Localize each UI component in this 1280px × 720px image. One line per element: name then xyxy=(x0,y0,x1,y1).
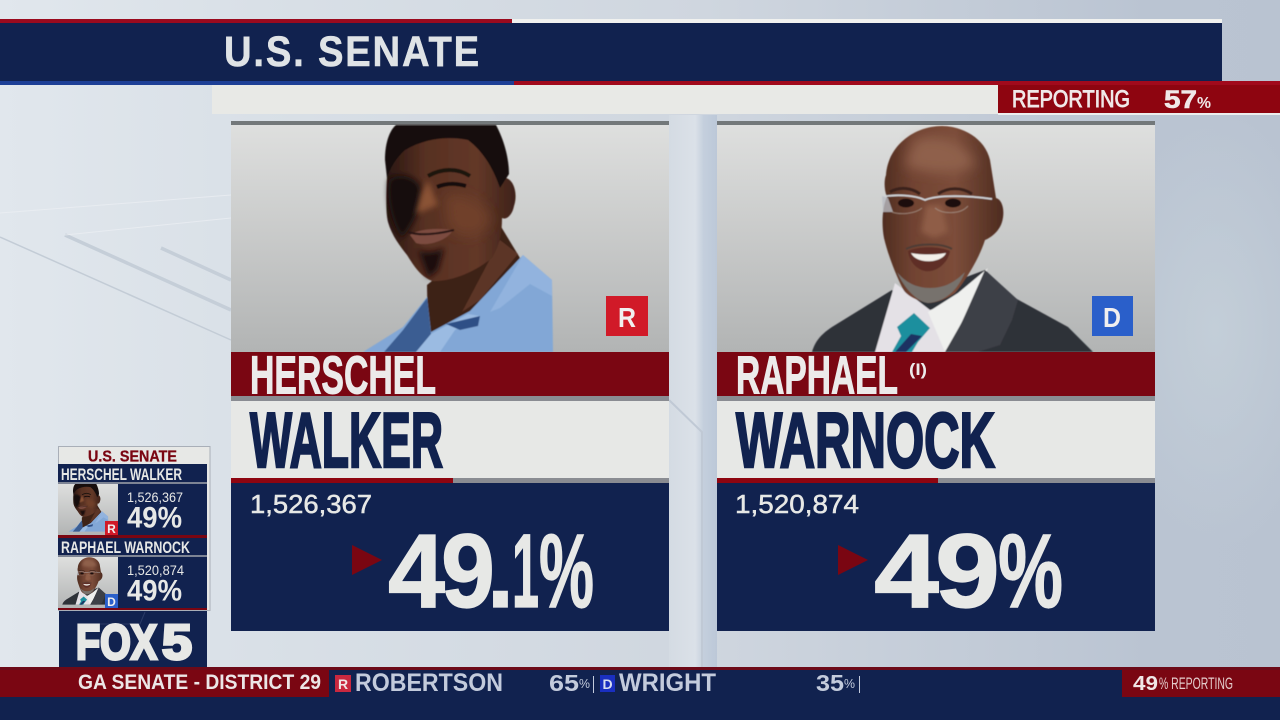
ticker reporting: % REPORTING xyxy=(1159,674,1233,693)
last name: WALKER xyxy=(250,396,443,484)
party badge R: R xyxy=(618,302,636,333)
ticker badge D xyxy=(600,675,615,692)
panel: Herschel Walker xyxy=(231,121,669,631)
inset name Walker: HERSCHEL WALKER xyxy=(61,465,182,484)
party badge D: D xyxy=(1103,302,1121,333)
ticker Robertson percent: % xyxy=(579,676,590,691)
ticker badge R xyxy=(335,675,351,692)
party badge D xyxy=(1092,296,1133,336)
ticker Robertson percent: 65 xyxy=(549,670,579,696)
percent: 1 xyxy=(512,513,539,630)
inset portrait Warnock xyxy=(62,557,106,605)
incumbent mark: (I) xyxy=(909,360,927,379)
arrow xyxy=(352,545,382,575)
ticker Wright percent xyxy=(816,670,855,696)
ticker Wright percent: % xyxy=(844,676,855,691)
ticker Wright percent: 35 xyxy=(816,670,844,696)
reporting percent: 57 xyxy=(1164,86,1197,114)
party badge R xyxy=(606,296,648,336)
ticker reporting: 49 xyxy=(1133,673,1158,695)
inset heading: U.S. SENATE xyxy=(88,448,177,466)
vote count: 1,526,367 xyxy=(250,489,372,519)
FOX 5 logo: 5 xyxy=(162,616,192,670)
title: U.S. SENATE xyxy=(224,28,481,76)
FOX 5 logo: FOX xyxy=(76,616,157,670)
percent: 4 xyxy=(388,513,445,630)
reporting label: REPORTING xyxy=(1012,86,1130,113)
percent: 4 xyxy=(874,513,939,630)
ticker race label: GA SENATE - DISTRICT 29 xyxy=(78,671,321,694)
ticker Robertson percent xyxy=(549,670,590,696)
reporting percent xyxy=(1164,86,1211,114)
ticker badge D: D xyxy=(602,676,613,692)
percent xyxy=(874,513,1063,630)
inset percent Walker: 49% xyxy=(127,502,182,534)
percent: % xyxy=(539,513,594,630)
ticker badge R: R xyxy=(338,676,348,692)
portrait: Walker xyxy=(363,125,553,352)
header bar xyxy=(0,19,1280,85)
vote count: 1,520,874 xyxy=(735,489,859,519)
inset badge R xyxy=(105,521,118,536)
percent: 9 xyxy=(441,513,495,630)
portrait: Warnock xyxy=(812,126,1093,352)
inset votes Walker: 1,526,367 xyxy=(127,490,183,505)
ticker xyxy=(0,667,1280,720)
inset percent Warnock: 49% xyxy=(127,574,182,608)
inset badge R: R xyxy=(107,522,116,536)
first name: RAPHAEL xyxy=(736,346,898,406)
inset portrait Walker xyxy=(68,484,108,532)
ticker Wright: WRIGHT xyxy=(619,669,716,697)
FOX 5 logo xyxy=(59,611,207,670)
inset results card xyxy=(58,446,210,610)
reporting bar xyxy=(212,85,1280,115)
reporting percent: % xyxy=(1197,95,1211,112)
percent: . xyxy=(487,513,514,630)
arrow xyxy=(838,545,868,575)
inset badge D: D xyxy=(107,595,116,609)
last name: WARNOCK xyxy=(736,396,995,484)
panel: Raphael Warnock xyxy=(717,121,1155,631)
percent xyxy=(388,513,594,630)
first name: HERSCHEL xyxy=(250,346,436,406)
ticker Robertson: ROBERTSON xyxy=(355,669,503,697)
inset votes Warnock: 1,520,874 xyxy=(127,563,184,578)
ticker reporting xyxy=(1133,673,1233,695)
inset badge D xyxy=(105,594,118,609)
inset name Warnock: RAPHAEL WARNOCK xyxy=(61,538,191,557)
percent: % xyxy=(998,513,1063,630)
percent: 9 xyxy=(935,513,1000,630)
